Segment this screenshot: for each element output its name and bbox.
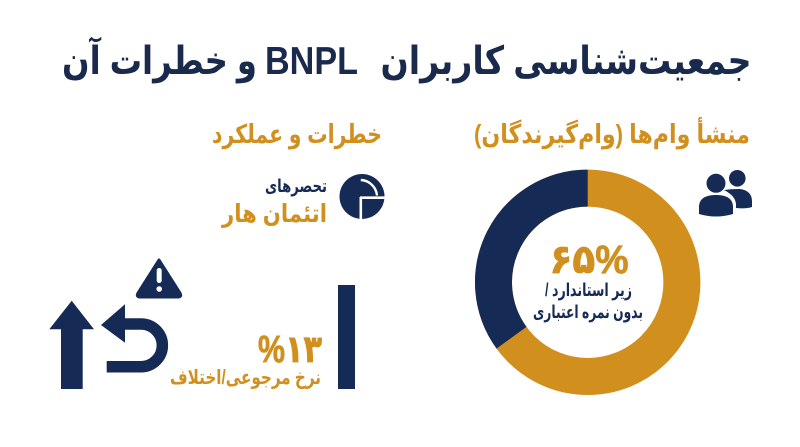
icon: return arrow xyxy=(101,304,162,367)
heading: risks and performance: خطرات و عملکرد xyxy=(212,119,382,150)
text: return rate label: نرخ مرجوعی/اختلاف xyxy=(170,367,321,389)
title: BNPL xyxy=(265,40,358,83)
icon: warning triangle xyxy=(137,260,181,297)
title: و خطرات آن xyxy=(62,36,257,84)
donut label: بدون نمره اعتباری xyxy=(533,302,643,323)
text: bad credit label: اتئمان هار xyxy=(220,200,327,228)
donut label xyxy=(533,280,643,323)
donut label: زیر استاندارد / xyxy=(545,280,632,301)
donut chart xyxy=(493,188,682,376)
heading: loan origin: منشأ وام‌ها (وام‌گیرندگان) xyxy=(474,117,750,150)
icon: people xyxy=(699,170,752,216)
icon: pie chart xyxy=(340,174,386,220)
text: late payments label: تحصرهای xyxy=(265,176,327,197)
donut value: ۶۵% xyxy=(550,238,628,282)
text: return rate value: %۱۳ xyxy=(258,329,322,371)
bar xyxy=(338,285,355,389)
title xyxy=(62,36,752,84)
icon: up arrow xyxy=(49,301,94,389)
